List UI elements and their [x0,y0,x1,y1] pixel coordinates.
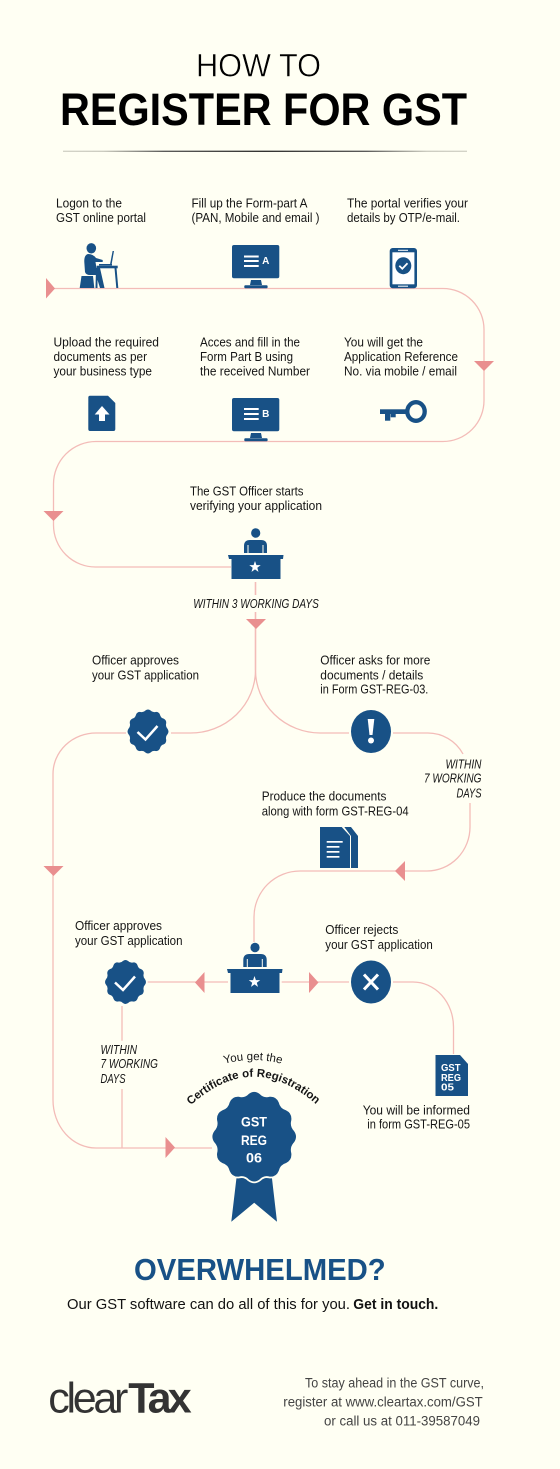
logo: clearTax: clear [48,1374,128,1422]
icon: monitor A [232,245,279,288]
icon: certificate medal GST REG 06 [212,1092,296,1222]
step: informed text: You will be informed [363,1103,470,1118]
logo: clearTax [48,1374,192,1422]
arrow: down to decision [246,619,266,629]
step: informed text: in form GST-REG-05 [367,1117,470,1132]
icon: GST REG 05 document: GST [441,1062,461,1074]
step: form part A text: (PAN, Mobile and email ) [192,210,320,225]
title: REGISTER FOR GST [60,84,467,135]
contact text [283,1376,484,1429]
icon: certificate medal GST REG 06: REG [241,1132,267,1148]
arrow: left to documents [395,861,405,881]
icon: GST REG 05 document: 05 [441,1082,454,1094]
icon: exclamation [351,710,391,753]
step: portal verifies text: The portal verifies your [347,196,469,210]
step: application reference text: No. via mobile / email [344,364,457,379]
step: upload text: documents as per [54,349,148,364]
arrow: down far left [44,866,64,876]
arrow: down right side [474,361,494,371]
arrow: start of flow [46,278,55,298]
step: second officer approves text: your GST application [75,933,182,948]
heading: overwhelmed: OVERWHELMED? [134,1253,386,1287]
step: produce documents text: Produce the documents [262,789,387,804]
icon: monitor B: B [262,409,269,420]
icon: approval badge [128,710,168,753]
step: officer verifies text [190,484,322,513]
step: form part B text [200,335,311,379]
icon: rejection cross [351,960,391,1004]
step: produce documents text [262,789,409,819]
step: portal verifies text [347,196,469,225]
step: logon text: GST online portal [56,210,146,225]
step: application reference text: Application Reference [344,349,458,364]
step: officer asks text: documents / details [320,668,424,683]
icon: certificate medal GST REG 06: 06 [246,1150,262,1166]
label: within 7 working days left: DAYS [100,1071,126,1086]
logo: clearTax: Tax [128,1374,192,1422]
call to action text: Our GST software can do all of this for you. [67,1296,350,1313]
step: officer approves text: your GST application [92,668,199,683]
contact text: or call us at 011-39587049 [324,1414,480,1429]
step: officer rejects text [325,922,433,952]
step: officer asks text [320,653,430,697]
call to action text: Get in touch. [353,1296,438,1313]
step: form part A text [192,196,320,225]
step: second officer approves text: Officer approves [75,918,162,933]
contact text: register at www.cleartax.com/GST [283,1395,483,1410]
arrow: right to certificate [166,1137,175,1158]
icon: person at laptop [80,243,118,288]
step: logon text [56,196,146,225]
icon: second approval badge [105,960,146,1004]
label: within 7 working days left: WITHIN [100,1042,137,1057]
label: within 7 working days left: 7 WORKING [100,1056,158,1071]
icon: documents [320,827,358,868]
step: officer verifies text: verifying your application [190,498,322,513]
icon: phone verified [390,248,417,288]
label: within 3 working days: WITHIN 3 WORKING DAYS [193,596,319,611]
curved heading: certificate of registration: Certificate of Registration [187,1068,319,1104]
step: officer approves text: Officer approves [92,653,179,668]
label: within 7 working days right [424,756,482,800]
step: officer approves text [92,653,199,683]
arrow: down left side [44,511,64,521]
icon: certificate medal GST REG 06: GST [241,1114,267,1130]
arrow: right to rejection [309,972,318,993]
step: officer asks text: in Form GST-REG-03. [320,682,428,697]
step: produce documents text: along with form GST-REG-04 [262,804,409,819]
step: officer asks text: Officer asks for more [320,653,430,668]
step: form part B text: Acces and fill in the [200,335,300,350]
title: HOW TO [196,48,321,84]
step: second officer approves text [75,918,182,948]
step: application reference text: You will get the [344,335,423,350]
contact text: To stay ahead in the GST curve, [305,1376,484,1391]
icon: key [380,402,425,421]
icon: monitor A: A [262,256,269,267]
icon: GST REG 05 document [436,1055,468,1096]
label: within 7 working days right: WITHIN [446,756,482,771]
step: logon text: Logon to the [56,196,122,210]
step: form part A text: Fill up the Form-part A [192,196,308,210]
step: form part B text: Form Part B using [200,349,293,364]
icon: second officer at desk [227,943,282,993]
step: upload text [54,335,159,379]
curved heading: certificate of registration [187,1052,319,1104]
step: upload text: your business type [54,364,152,379]
step: upload text: Upload the required [54,335,159,350]
arrow: left to approval [195,972,204,993]
step: officer verifies text: The GST Officer starts [190,484,304,499]
title [60,48,467,135]
label: within 7 working days right: DAYS [456,785,482,800]
step: officer rejects text: Officer rejects [325,922,399,937]
icon: GST REG 05 document: REG [441,1072,461,1084]
step: application reference text [344,335,458,379]
label: within 7 working days right: 7 WORKING [424,770,482,785]
curved heading: certificate of registration: You get the [222,1052,282,1064]
icon: upload document [88,396,115,431]
step: portal verifies text: details by OTP/e-mail. [347,210,460,225]
step: officer rejects text: your GST application [325,937,433,952]
step: form part B text: the received Number [200,364,311,379]
icon: monitor B [232,398,279,441]
flow connector lines [50,288,484,1148]
label: within 7 working days left [100,1042,158,1086]
icon: officer at desk [228,528,284,579]
step: informed text [363,1103,470,1132]
